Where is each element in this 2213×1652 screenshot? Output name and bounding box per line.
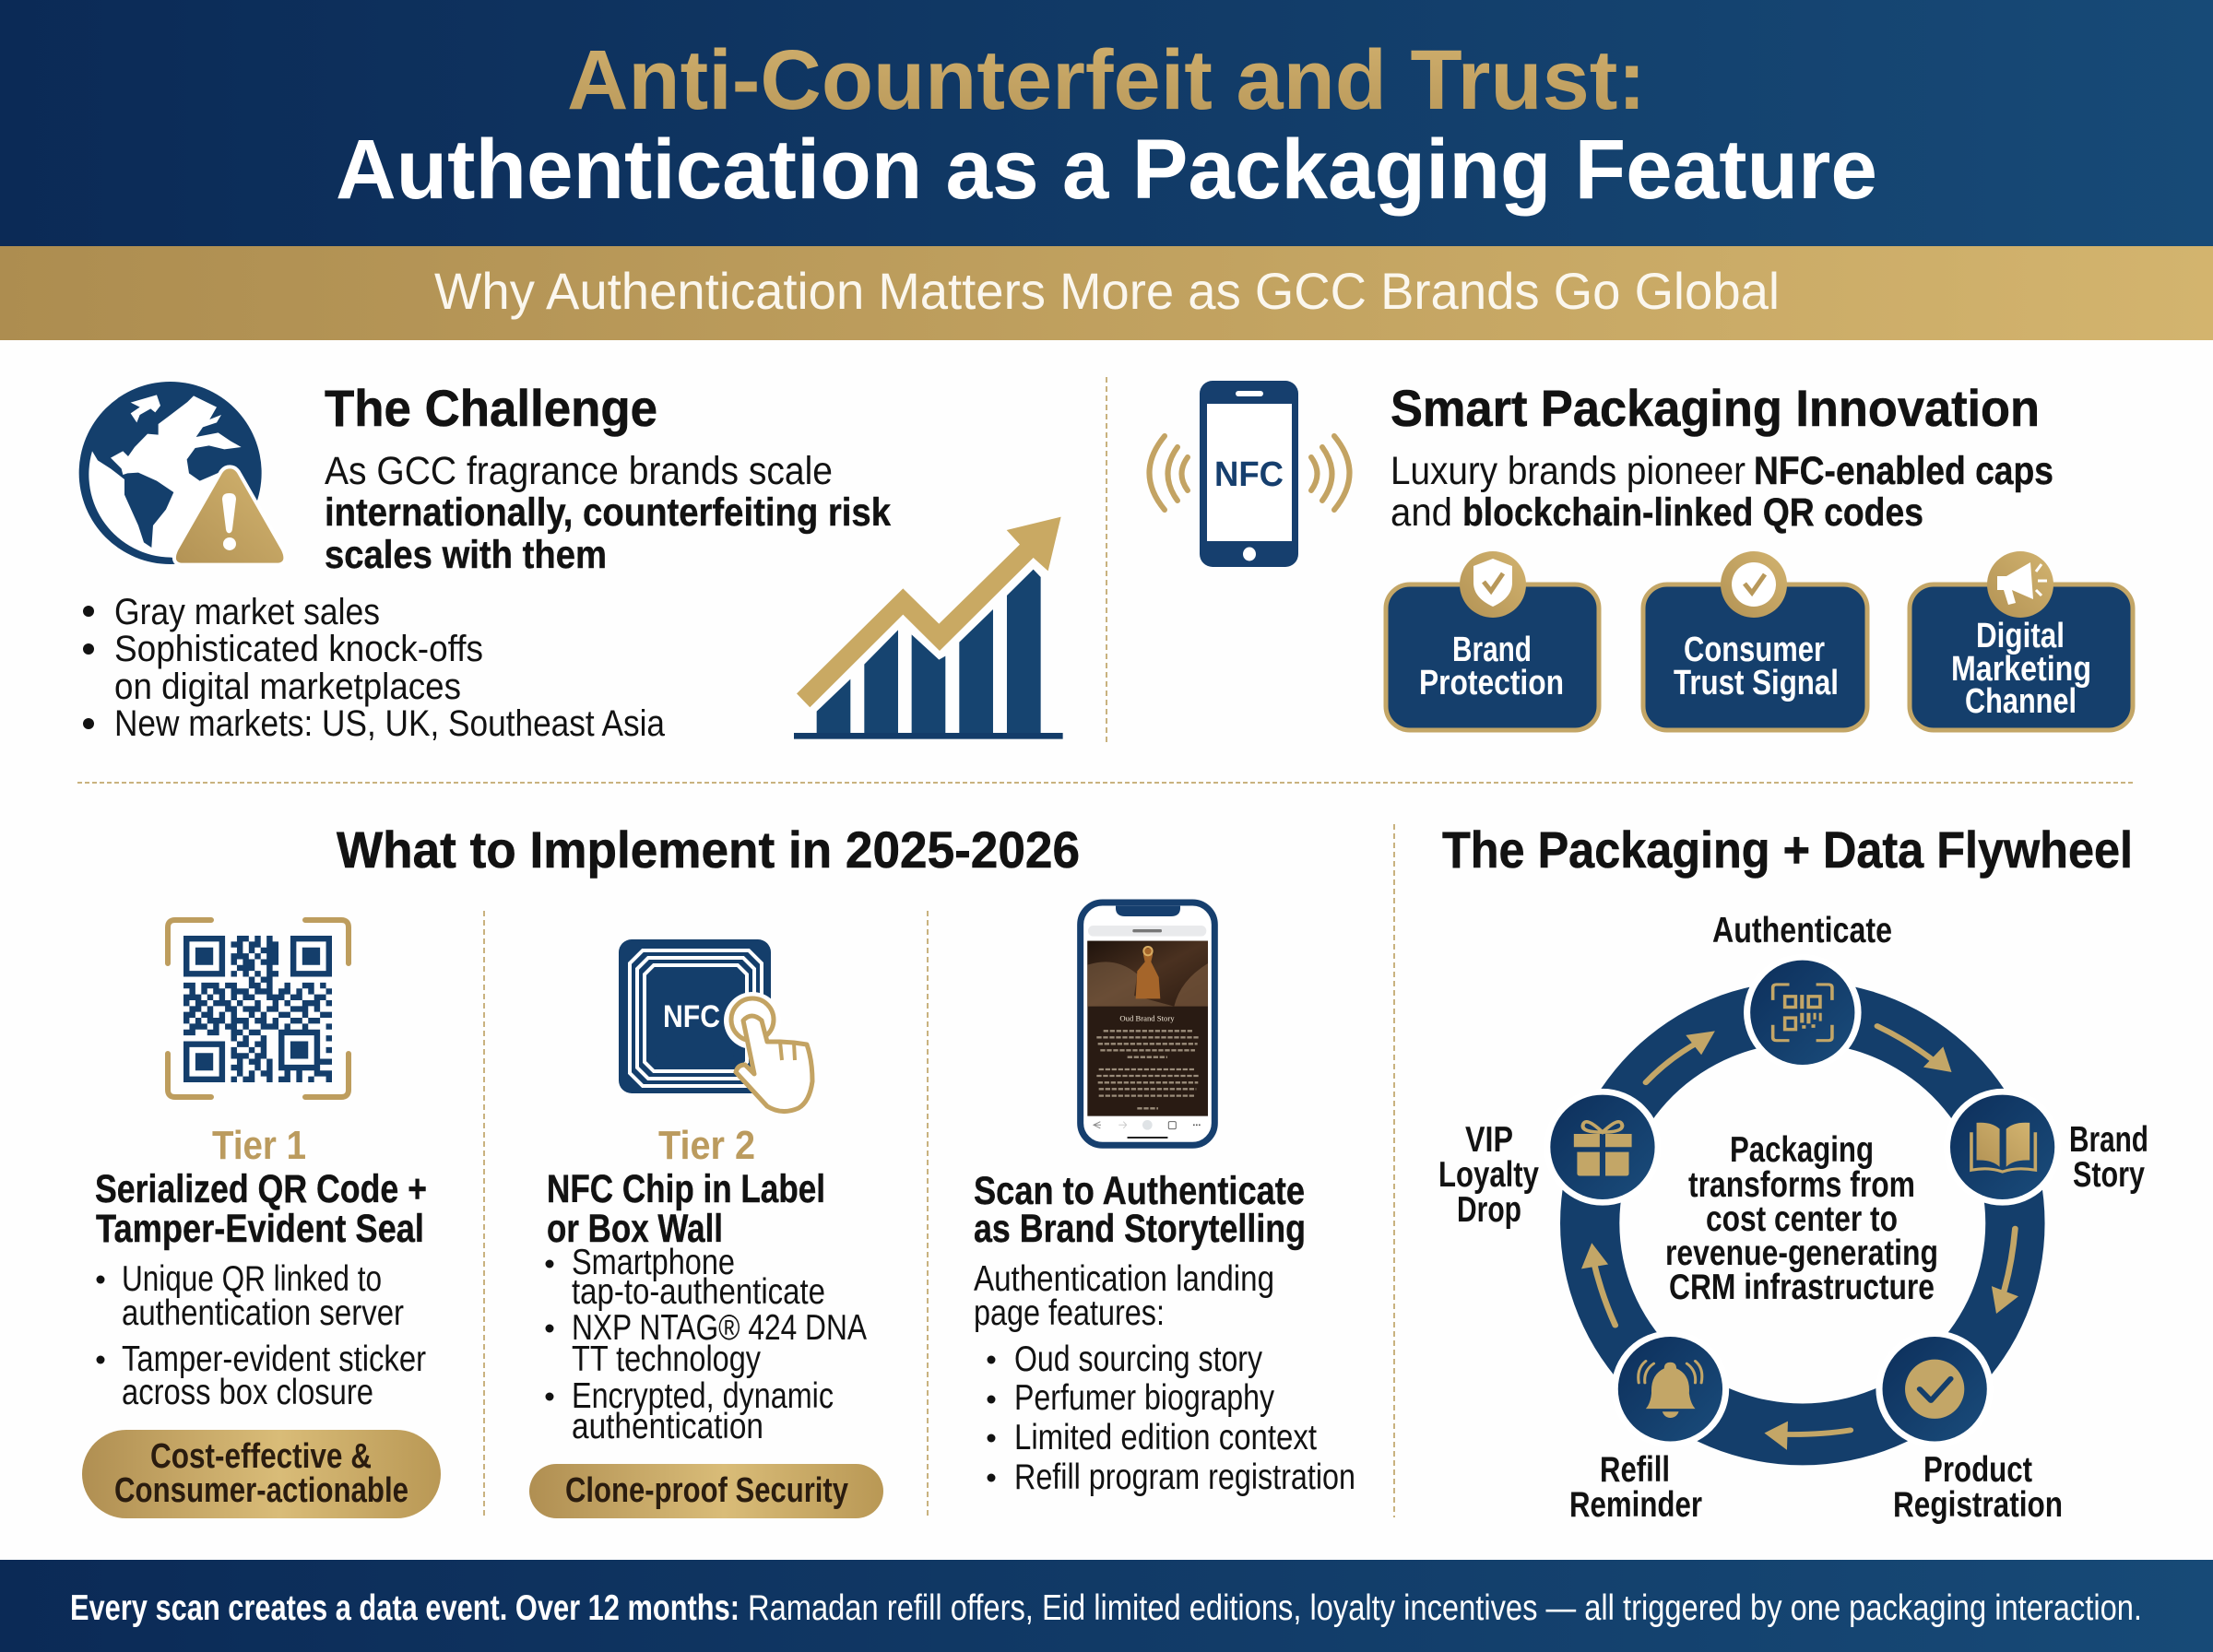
icon: NFC phone [1149, 381, 1350, 567]
divider: column 2 [927, 911, 929, 1517]
text block: innovation summary: blockchain-linked QR codes [1462, 490, 1923, 535]
icon: NFC chip with tapping hand [619, 939, 812, 1112]
labels: flywheel stages: Drop [1457, 1190, 1521, 1230]
card: consumer trust signal: Consumer [1684, 631, 1825, 669]
icon: QR code with corner brackets [168, 920, 349, 1097]
text block: flywheel center: transforms from [1688, 1165, 1915, 1205]
bullet list: tier 1 [96, 1259, 426, 1412]
heading: smart packaging innovation: Smart Packaging Innovation [1391, 379, 2040, 437]
column: tier 2 [529, 939, 883, 1518]
heading: what to implement: What to Implement in 2025-2026 [337, 820, 1080, 879]
panel: smart packaging innovation [1149, 379, 2133, 730]
labels: flywheel stages: Brand [2069, 1120, 2148, 1160]
panel: the challenge [79, 379, 1063, 744]
heading: serialized QR code: Serialized QR Code + [95, 1167, 427, 1211]
card: consumer trust signal [1643, 551, 1867, 730]
pill: clone-proof security: Clone-proof Security [565, 1471, 848, 1510]
card: digital marketing channel: Digital [1976, 617, 2065, 655]
bullet list: risks: on digital marketplaces [114, 667, 461, 707]
bullet list: risks: Gray market sales [114, 592, 380, 632]
title: Anti-Counterfeit and Trust: [567, 33, 1646, 127]
column: brand storytelling [974, 903, 1355, 1497]
icon: globe with warning triangle [79, 382, 283, 565]
text block: flywheel center: revenue-generating [1665, 1233, 1938, 1273]
label: tier 1: Tier 1 [212, 1123, 306, 1168]
heading: scan to authenticate: as Brand Storytelling [974, 1207, 1306, 1251]
bullet list: tier 2 [546, 1243, 867, 1446]
text block: innovation summary [1391, 449, 2053, 535]
card: brand protection: Brand [1452, 631, 1532, 669]
card: digital marketing channel [1910, 551, 2133, 730]
icon: phone showing brand story page: Oud Brand Story [1119, 1014, 1175, 1023]
bullet list: landing page features: Oud sourcing story [1014, 1339, 1262, 1379]
node: product registration [1876, 1330, 1994, 1447]
heading: serialized QR code: Tamper-Evident Seal [96, 1207, 424, 1251]
text block: landing page intro: page features: [974, 1293, 1165, 1333]
panel: what to implement [82, 820, 1355, 1518]
label: tier 2: Tier 2 [658, 1123, 755, 1168]
icon: NFC phone: NFC [1214, 455, 1284, 494]
bullet list: tier 1: authentication server [122, 1293, 404, 1333]
title [336, 33, 1877, 217]
bullet list: tier 1: Unique QR linked to [122, 1259, 382, 1299]
heading: serialized QR code [95, 1167, 427, 1251]
text block: innovation summary: Luxury brands pioneer [1391, 449, 1746, 493]
text block: flywheel center [1665, 1130, 1938, 1307]
icon: phone showing brand story page [1081, 903, 1214, 1145]
bullet list: landing page features [987, 1339, 1355, 1497]
chart: rising bars with arrow [794, 517, 1063, 739]
heading: the challenge: The Challenge [325, 379, 657, 437]
text block: challenge summary [325, 449, 891, 577]
bullet list: risks: New markets: US, UK, Southeast Asia [114, 703, 666, 744]
bullet list: tier 2: tap-to-authenticate [572, 1272, 825, 1312]
text block: landing page intro: Authentication landing [974, 1259, 1274, 1299]
text block: challenge summary: As GCC fragrance brands scale [325, 449, 833, 493]
text block: innovation summary: NFC-enabled caps [1754, 449, 2053, 493]
bullet list: risks [83, 592, 666, 744]
labels: flywheel stages: Authenticate [1712, 911, 1892, 950]
text block: flywheel center: CRM infrastructure [1669, 1268, 1935, 1307]
card: brand protection [1386, 551, 1599, 730]
footer banner: Every scan creates a data event. Over 12 months: [70, 1588, 740, 1628]
header banner [0, 0, 2213, 246]
heading: scan to authenticate: Scan to Authenticate [974, 1169, 1305, 1213]
card: consumer trust signal: Trust Signal [1674, 664, 1839, 702]
heading: NFC chip: or Box Wall [547, 1207, 723, 1251]
labels: flywheel stages [1438, 911, 2148, 1525]
labels: flywheel stages: Product [1923, 1450, 2032, 1490]
column: tier 1 [82, 920, 441, 1518]
text block: innovation summary: and [1391, 490, 1452, 535]
labels: flywheel stages: Refill [1600, 1450, 1670, 1490]
labels: flywheel stages: Reminder [1569, 1485, 1702, 1525]
bullet list: tier 2: Encrypted, dynamic [572, 1376, 834, 1416]
labels: flywheel stages: VIP [1465, 1120, 1513, 1160]
panel: flywheel [1438, 820, 2148, 1525]
labels: flywheel stages: Loyalty [1438, 1155, 1539, 1195]
divider: column 1 [483, 911, 485, 1516]
bullet list: tier 2: TT technology [572, 1339, 761, 1379]
bullet list: tier 2: NXP NTAG® 424 DNA [572, 1308, 867, 1348]
card: digital marketing channel: Marketing [1951, 650, 2091, 689]
labels: flywheel stages: Registration [1893, 1485, 2063, 1525]
bullet list: tier 1: across box closure [122, 1373, 373, 1412]
text block: challenge summary: scales with them [325, 533, 607, 577]
diagram: flywheel ring [1544, 954, 2061, 1465]
arrows around ring [1593, 1026, 2015, 1434]
heading: flywheel: The Packaging + Data Flywheel [1442, 820, 2133, 879]
node: refill reminder [1612, 1330, 1729, 1447]
bullet list: landing page features: Refill program registration [1014, 1457, 1355, 1497]
pill: cost-effective [82, 1430, 441, 1518]
node: VIP loyalty drop [1544, 1089, 1662, 1206]
node: brand story [1944, 1089, 2061, 1206]
pill: clone-proof security [529, 1464, 883, 1518]
bullet list: tier 2: authentication [572, 1407, 763, 1446]
title: Authentication as a Packaging Feature [336, 123, 1877, 217]
divider: horizontal [77, 782, 2136, 784]
pill: cost-effective: Cost-effective & [150, 1437, 372, 1476]
footer banner [0, 1560, 2213, 1652]
bullet list: tier 1: Tamper-evident sticker [122, 1339, 426, 1379]
bullet list: risks: Sophisticated knock-offs [114, 629, 483, 669]
divider: flywheel [1393, 824, 1395, 1517]
text block: landing page intro [974, 1259, 1274, 1333]
text block: challenge summary: internationally, counterfeiting risk [325, 490, 891, 535]
bullet list: landing page features: Limited edition context [1014, 1418, 1317, 1457]
subtitle band: Why Authentication Matters More as GCC Brands Go Global [434, 262, 1780, 320]
bullet list: tier 2: Smartphone [572, 1243, 735, 1282]
card: digital marketing channel: Channel [1965, 682, 2077, 721]
heading: NFC chip: NFC Chip in Label [547, 1167, 825, 1211]
labels: flywheel stages: Story [2073, 1155, 2145, 1195]
text block: flywheel center: Packaging [1730, 1130, 1874, 1170]
card: brand protection: Protection [1419, 664, 1564, 702]
divider: top panels [1106, 377, 1107, 744]
node: authenticate [1744, 954, 1862, 1071]
icon: NFC chip with tapping hand: NFC [663, 999, 720, 1034]
heading: scan to authenticate [974, 1169, 1306, 1251]
subtitle band [0, 246, 2213, 340]
pill: cost-effective: Consumer-actionable [114, 1471, 408, 1510]
text block: flywheel center: cost center to [1706, 1199, 1898, 1239]
heading: NFC chip [547, 1167, 825, 1251]
bullet list: landing page features: Perfumer biography [1014, 1378, 1274, 1418]
